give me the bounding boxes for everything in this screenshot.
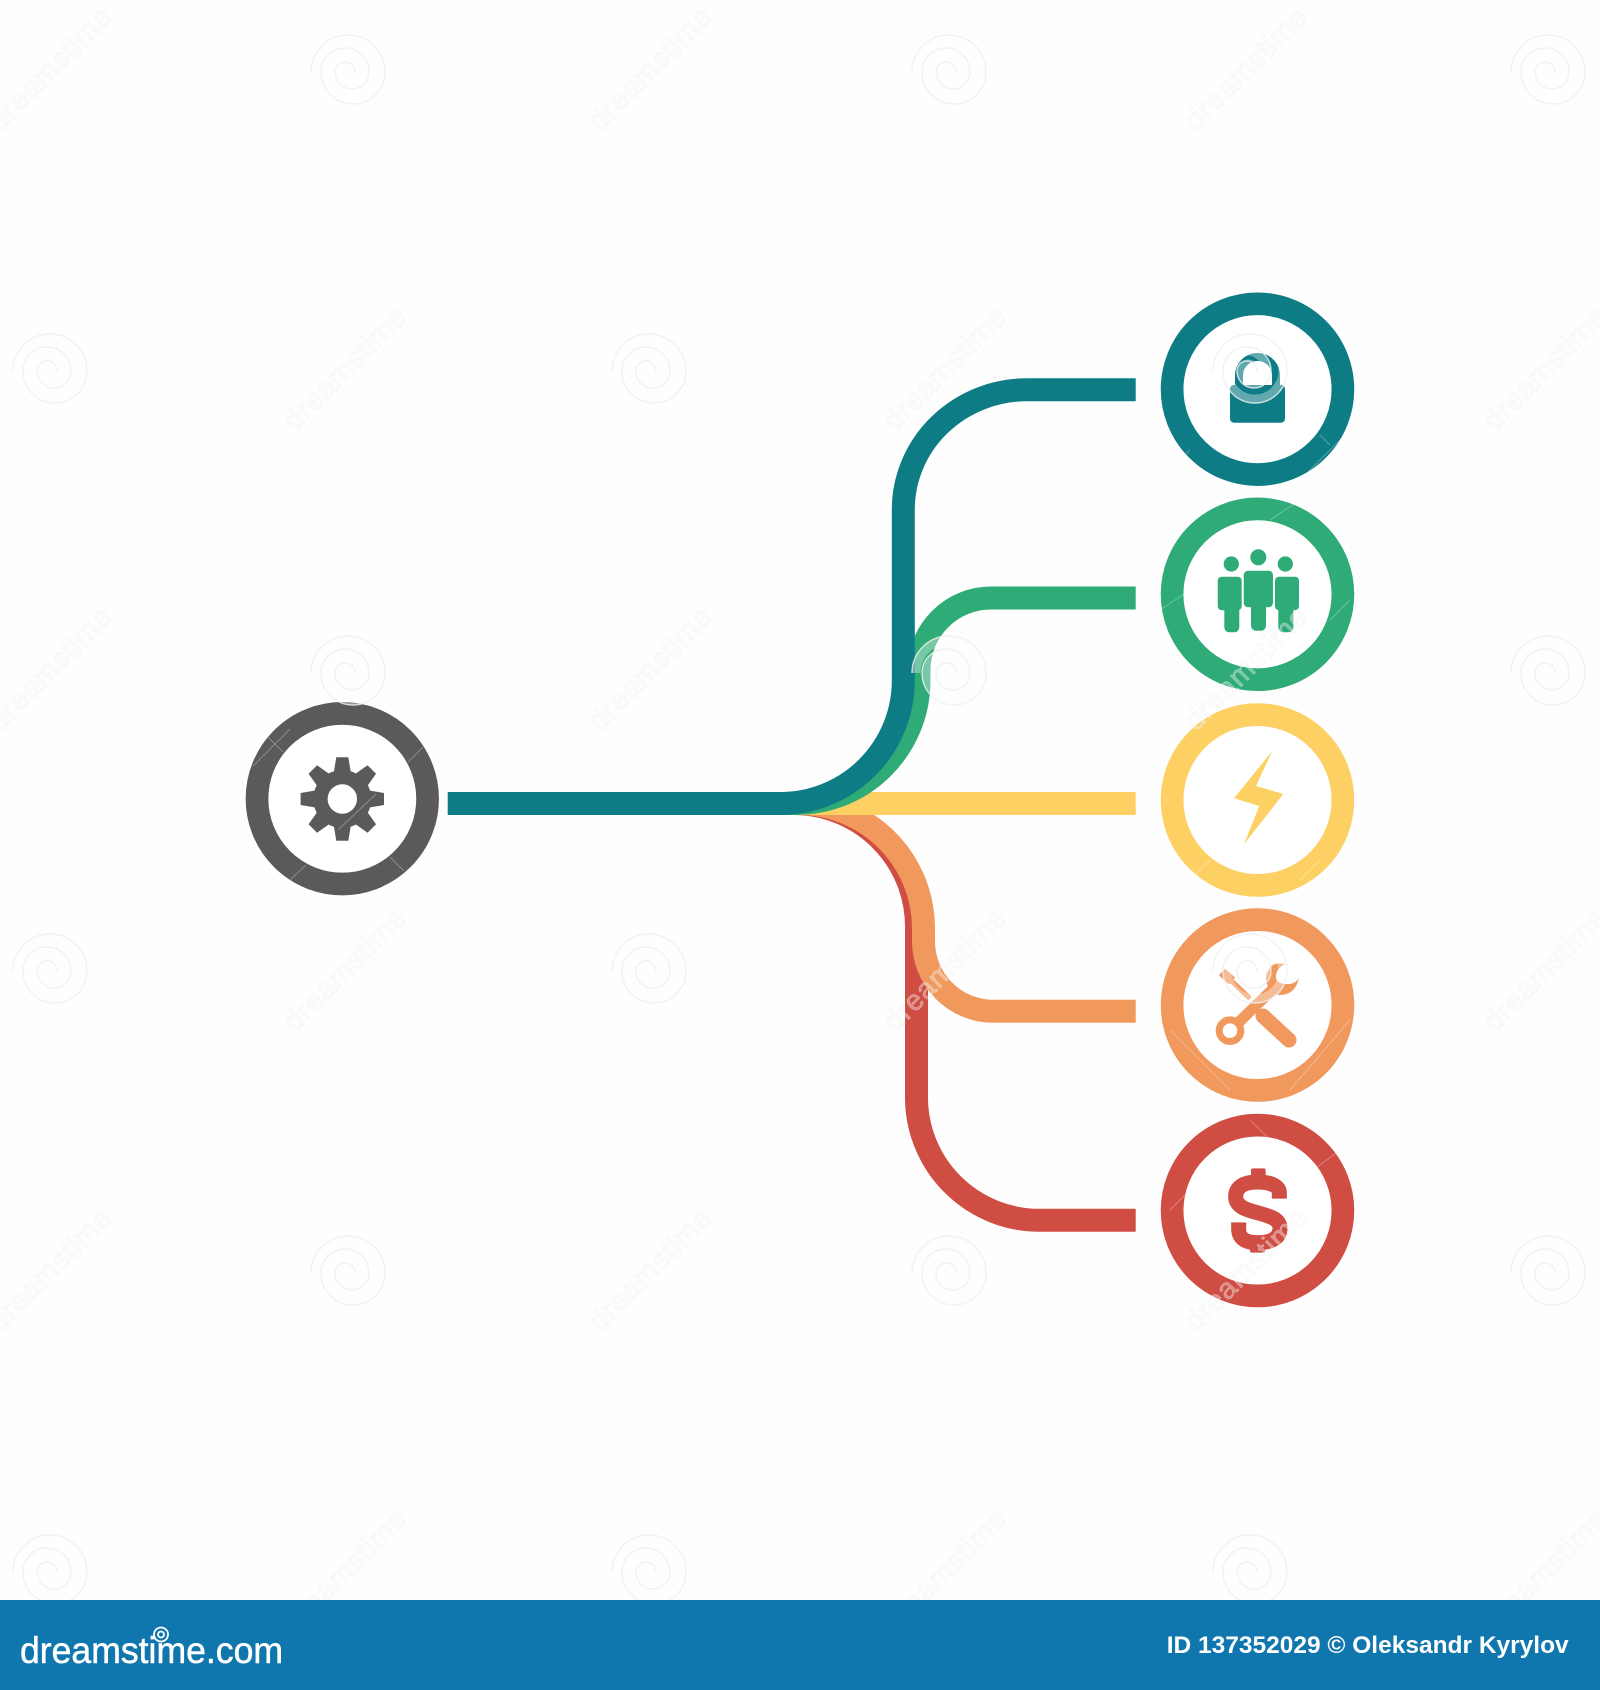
logo spiral (154, 1628, 168, 1642)
connector lines branching from gear to five icons (448, 390, 1136, 1220)
watermark words: dreamstime (1178, 601, 1314, 737)
tools ring (1172, 920, 1343, 1090)
icon: crossed wrench and screwdriver (1219, 964, 1299, 1042)
watermark words: dreamstime (1178, 1, 1314, 137)
watermark words: dreamstime (277, 902, 413, 1038)
banner background (0, 1600, 1600, 1690)
watermark words: dreamstime (277, 301, 413, 437)
watermark words: dreamstime (277, 1503, 413, 1639)
lock ring (1172, 304, 1343, 475)
icon: gear (301, 757, 384, 841)
watermark hairlines (253, 430, 1350, 1210)
icon: padlock (1230, 357, 1285, 423)
node: lightning (1172, 715, 1343, 885)
logo text: dreamstime.com (20, 1630, 283, 1671)
watermark words: dreamstime (877, 1503, 1013, 1639)
source node: gear (257, 713, 428, 884)
line: yellow branch to lightning (780, 792, 1136, 815)
people ring (1172, 509, 1343, 680)
line: orange branch to tools (780, 804, 1136, 1011)
node: people (1172, 509, 1343, 680)
node: tools (1172, 920, 1343, 1090)
gear ring (257, 713, 428, 884)
watermark words: dreamstime (1178, 1202, 1314, 1338)
node: dollar (1172, 1125, 1343, 1296)
line: green branch to people (770, 598, 1136, 804)
node: lock (1172, 304, 1343, 475)
footer banner (0, 1600, 1600, 1690)
icon: lightning bolt (1234, 751, 1283, 844)
icon: team of three people (1218, 549, 1299, 632)
watermark words: dreamstime (582, 1202, 718, 1338)
watermark words: dreamstime (877, 301, 1013, 437)
watermark words: dreamstime (582, 601, 718, 737)
line: teal trunk and branch to lock (448, 390, 1136, 804)
image id and author credit: ID 137352029 © Oleksandr Kyrylov (1167, 1632, 1569, 1659)
line: red branch to dollar (780, 804, 1136, 1220)
icon: dollar sign (1236, 1168, 1280, 1253)
watermark words: dreamstime (582, 1, 718, 137)
dollar ring (1172, 1125, 1343, 1296)
lightning ring (1172, 715, 1343, 885)
watermark words: dreamstime (877, 902, 1013, 1038)
